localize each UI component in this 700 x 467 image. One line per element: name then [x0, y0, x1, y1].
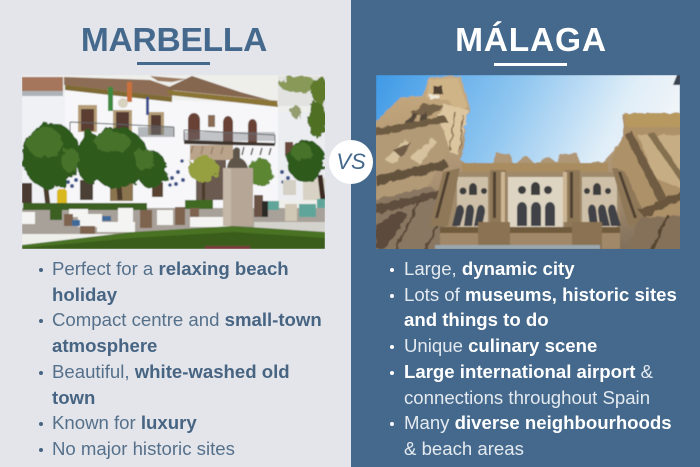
yellow post box — [57, 189, 67, 206]
bullet: culinary scene: Unique culinary scene — [404, 335, 597, 356]
statue — [223, 168, 253, 226]
lower cornice — [440, 227, 620, 233]
bullet list: Marbella: atmosphere — [52, 335, 157, 356]
orange trees — [22, 76, 328, 189]
bullet: no major historic sites: No major historic sites — [52, 438, 235, 459]
heading underline — [494, 63, 567, 66]
photo: Málaga cathedral — [376, 75, 680, 249]
balconies — [70, 122, 275, 144]
main facade — [65, 88, 278, 215]
panel: Marbella — [0, 0, 351, 467]
bullet: relaxing beach holiday: Perfect for a relaxing beach — [52, 258, 289, 279]
foreground hedge — [22, 226, 325, 249]
arch entrance — [190, 145, 233, 160]
bullet list: Málaga: connections throughout Spain — [404, 386, 650, 408]
tower light faces — [426, 78, 468, 112]
bullet list: Málaga — [390, 258, 677, 459]
bullet: international airport: Large international airport & — [404, 361, 653, 382]
upper windows — [78, 105, 97, 132]
bullet: dynamic city: Large, dynamic city — [404, 258, 575, 279]
bullet: museums and historic sites: Lots of museums, historic sites — [404, 284, 677, 305]
corner fragment — [673, 75, 680, 85]
bullet list: Málaga: & beach areas — [404, 438, 524, 459]
facade base — [445, 172, 620, 249]
heading underline — [137, 62, 210, 64]
VS badge — [329, 140, 373, 184]
centre roofs — [157, 78, 187, 90]
bullet list: Marbella — [39, 258, 322, 459]
trunks — [45, 170, 120, 206]
left building — [22, 92, 67, 212]
bullet: diverse neighbourhoods: Many diverse neighbourhoods — [404, 412, 672, 433]
arched windows — [452, 202, 621, 226]
bullet: white-washed old town: Beautiful, white-washed old — [52, 361, 290, 382]
flags — [108, 87, 113, 111]
cathedral silhouette — [370, 76, 685, 255]
tables and chairs — [22, 208, 230, 232]
rose windows — [460, 182, 611, 195]
terrace — [22, 208, 325, 234]
bullet list: Marbella: town — [52, 386, 95, 408]
wall tile pots — [66, 159, 300, 188]
bullet: compact centre: Compact centre and small-town — [52, 309, 322, 330]
photo: Marbella town hall square — [22, 75, 325, 249]
bullet list: Marbella: holiday — [52, 284, 117, 305]
top-right foliage — [280, 77, 320, 93]
bullet list: Málaga: and things to do — [404, 309, 549, 330]
facade top cornice — [462, 163, 608, 172]
panel: Málaga — [351, 0, 700, 467]
heading: Málaga: MÁLAGA — [455, 22, 607, 59]
doors and lower windows — [22, 183, 32, 203]
tower details — [433, 86, 443, 94]
teal tables at right — [268, 201, 279, 210]
corbels — [191, 146, 271, 155]
heading: Marbella: MARBELLA — [81, 22, 267, 59]
pilasters — [430, 168, 648, 228]
VS badge: VS — [336, 149, 366, 174]
right tower — [610, 113, 685, 255]
bullet: luxury: Known for luxury — [52, 412, 197, 433]
